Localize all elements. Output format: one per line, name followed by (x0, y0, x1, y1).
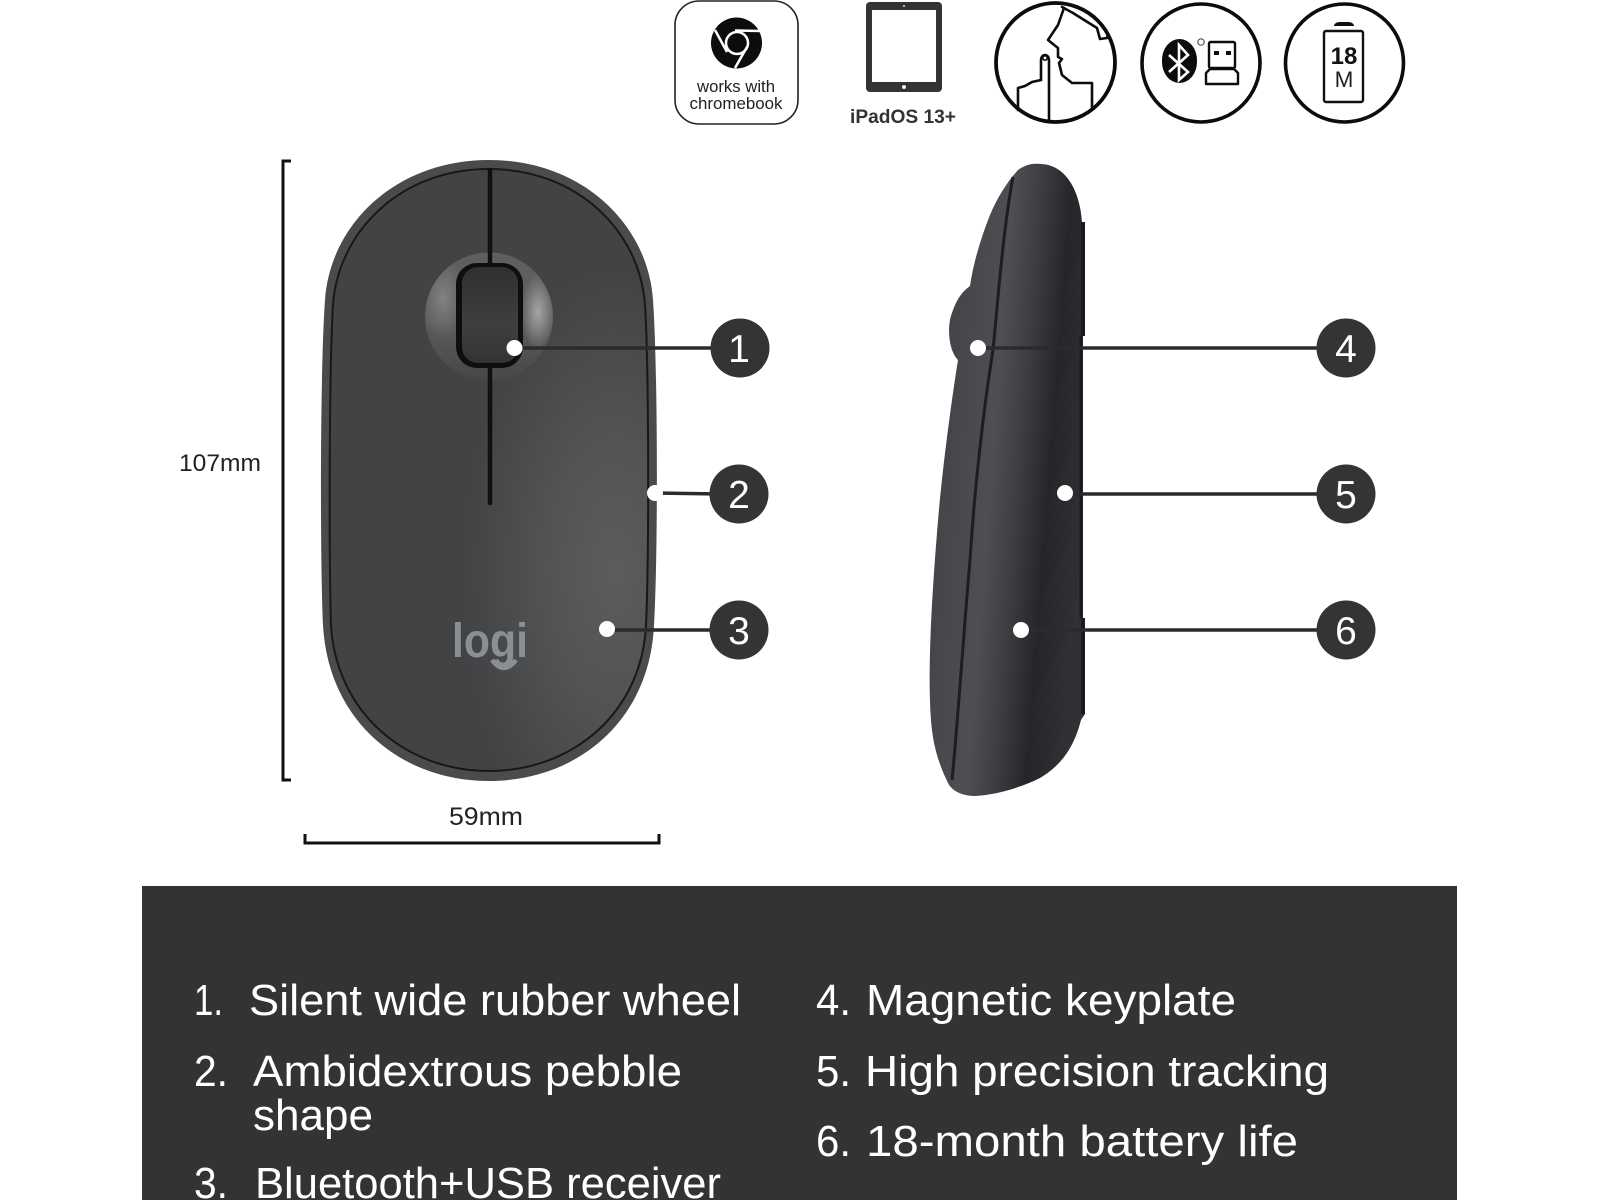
mouse: side view (930, 164, 1085, 796)
callout 1 (506, 318, 770, 378)
callout 6: 6 (1335, 610, 1357, 653)
iPadOS label: iPadOS 13+ (850, 107, 956, 128)
callout 5 (1057, 464, 1376, 524)
icon: iPad with iPadOS label (850, 2, 956, 128)
scroll wheel (425, 252, 553, 370)
logi logo: logi (452, 615, 528, 668)
right feature column: 6. (816, 1117, 851, 1166)
callout 4: 4 (1335, 328, 1357, 371)
dimension: width 59mm (305, 803, 659, 843)
right feature column: Magnetic keyplate (866, 976, 1236, 1025)
right feature column (816, 976, 1329, 1166)
callout 2: 2 (728, 474, 750, 517)
dimension: width 59mm: 59mm (449, 803, 523, 831)
icon: 18 month battery: 18 (1331, 43, 1357, 70)
left feature column: shape (253, 1091, 373, 1140)
mouse: top view (321, 160, 657, 781)
callout 3 (599, 600, 768, 660)
badge text (690, 78, 783, 113)
callout 6 (1013, 600, 1376, 660)
left feature column (194, 976, 741, 1200)
right feature column: High precision tracking (865, 1047, 1329, 1096)
left feature column: Ambidextrous pebble (253, 1047, 682, 1096)
panel: feature list (142, 886, 1457, 1200)
icon: silent clicks, finger on lips (996, 3, 1115, 122)
callout 1: 1 (728, 328, 750, 371)
Bluetooth logo (1162, 39, 1197, 83)
badge text: chromebook (690, 95, 783, 113)
icon: 18 month battery: M (1335, 67, 1353, 92)
callout 3: 3 (728, 610, 750, 653)
left feature column: 1. (194, 976, 223, 1025)
right feature column: 5. (816, 1047, 851, 1096)
right feature column: 4. (816, 976, 851, 1025)
dimension: height 107mm (179, 161, 291, 780)
icon: Bluetooth and USB receiver (1142, 4, 1260, 122)
dimension: height 107mm: 107mm (179, 450, 261, 477)
right feature column: 18-month battery life (866, 1117, 1298, 1166)
icon: chrome logo (711, 18, 762, 68)
left feature column: Silent wide rubber wheel (249, 976, 741, 1025)
icon: 18 month battery (1286, 4, 1404, 122)
callout 2 (647, 464, 768, 524)
icon: works with chromebook badge (675, 1, 798, 124)
callout 4 (970, 318, 1376, 378)
USB receiver (1206, 42, 1238, 84)
callout 5: 5 (1335, 474, 1357, 517)
left feature column: 2. (194, 1047, 228, 1096)
badge text: works with (696, 78, 775, 96)
